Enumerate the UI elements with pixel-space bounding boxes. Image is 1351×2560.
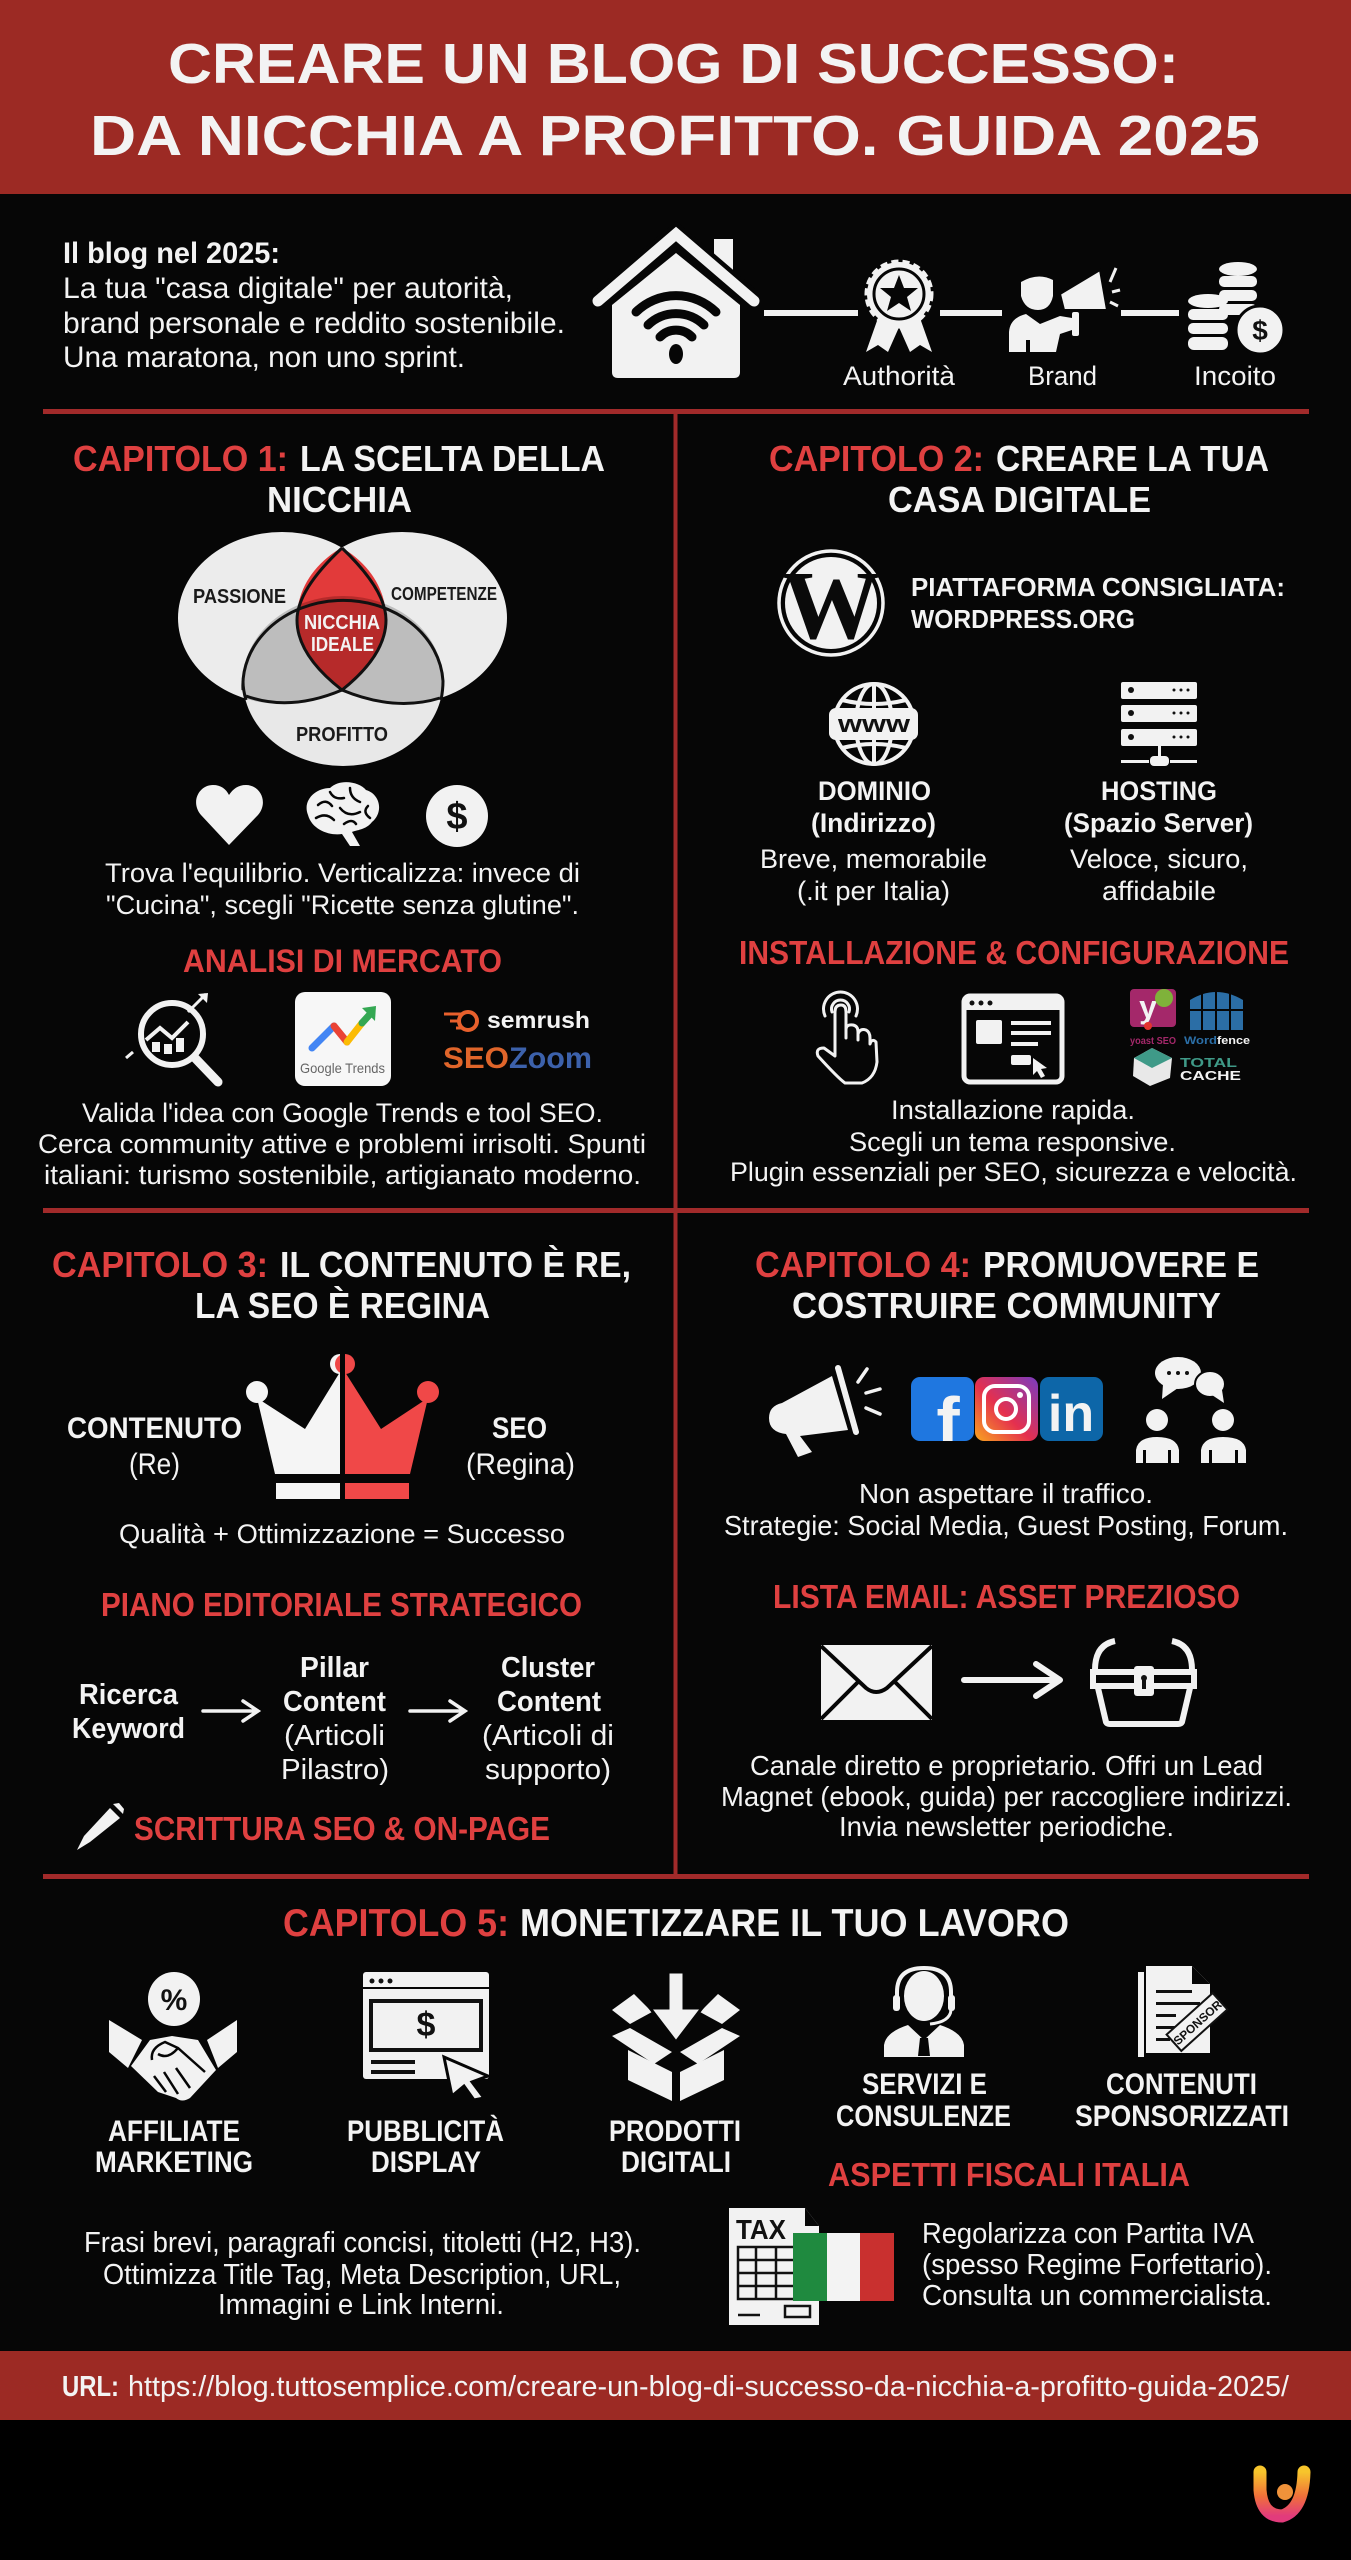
heading: chapter 2: CREARE LA TUA	[996, 438, 1269, 479]
logo: wordpress: W	[782, 552, 880, 660]
heading: chapter 1: CAPITOLO 1:	[73, 438, 288, 479]
text: tax advice: (spesso Regime Forfettario).	[922, 2249, 1272, 2281]
text: domain: (Indirizzo)	[811, 808, 936, 838]
icon: brain	[307, 782, 379, 846]
icon: community people	[1136, 1357, 1246, 1463]
venn diagram	[178, 532, 507, 766]
footer url banner: https://blog.tuttosemplice.com/creare-un-blog-di-successo-da-nicchia-a-profitto-guida-2025/	[128, 2371, 1290, 2403]
text: writing tips: Immagini e Link Interni.	[218, 2289, 504, 2321]
icon: sponsored document	[1138, 1966, 1227, 2057]
text: promotion: Non aspettare il traffico.	[859, 1478, 1153, 1509]
icon: affiliate handshake	[109, 1972, 237, 2100]
subheading: email list: LISTA EMAIL: ASSET PREZIOSO	[773, 1578, 1240, 1615]
text: recommended platform: WORDPRESS.ORG	[911, 604, 1135, 634]
text: market analysis: Valida l'idea con Google Trends e tool SEO.	[82, 1098, 603, 1128]
header banner: CREARE UN BLOG DI SUCCESSO:	[168, 32, 1179, 96]
flow step: keyword research	[72, 1679, 185, 1745]
icon: facebook	[911, 1377, 974, 1441]
text: email list	[721, 1750, 1292, 1842]
intro text: Il blog nel 2025:	[63, 237, 280, 270]
icon: affiliate handshake: %	[161, 1984, 187, 2017]
label: sponsored content	[1075, 2068, 1289, 2133]
label: sponsored content: CONTENUTI	[1106, 2068, 1257, 2101]
label: sponsored content: SPONSORIZZATI	[1075, 2100, 1289, 2133]
text: email list: Magnet (ebook, guida) per raccogliere indirizzi.	[721, 1781, 1292, 1812]
icon: tax document with italian flag	[729, 2208, 894, 2325]
heading: chapter 5: MONETIZZARE IL TUO LAVORO	[520, 1902, 1069, 1945]
subheading: editorial plan: PIANO EDITORIALE STRATEGICO	[101, 1586, 582, 1623]
icon: sponsored document: SPONSOR	[1171, 1997, 1225, 2048]
flow step: cluster content: (Articoli di	[482, 1720, 614, 1752]
heading: chapter 5	[283, 1902, 1069, 1945]
text: tax advice: Regolarizza con Partita IVA	[922, 2218, 1255, 2250]
icon labels: Brand	[1028, 361, 1097, 391]
heading: chapter 3: LA SEO È REGINA	[195, 1285, 490, 1326]
logo: google trends	[295, 992, 391, 1086]
footer url banner: URL:	[62, 2371, 119, 2403]
subheading: market analysis: ANALISI DI MERCATO	[183, 943, 502, 979]
label: display advertising: DISPLAY	[371, 2146, 481, 2179]
heading: chapter 1: LA SCELTA DELLA	[300, 438, 605, 479]
logo: seozoom: SEO	[443, 1042, 509, 1075]
text: recommended platform: PIATTAFORMA CONSIGLIATA:	[911, 572, 1285, 602]
panel: chapter 5	[84, 1902, 1289, 2325]
venn diagram: PROFITTO	[296, 724, 388, 746]
heading: chapter 2	[769, 438, 1269, 520]
label: digital products: DIGITALI	[621, 2146, 731, 2179]
icon: tax document with italian flag: TAX	[736, 2214, 786, 2245]
text: promotion	[724, 1478, 1288, 1541]
flow step: keyword research: Ricerca	[79, 1679, 179, 1711]
logo: semrush	[444, 1007, 590, 1033]
arrow	[964, 1664, 1060, 1696]
logo: semrush: semrush	[487, 1007, 590, 1033]
intro text	[63, 237, 565, 374]
venn diagram: IDEALE	[311, 634, 374, 656]
venn diagram: NICCHIA	[304, 612, 380, 634]
label: digital products	[609, 2115, 741, 2179]
text: promotion: Strategie: Social Media, Guest Posting, Forum.	[724, 1510, 1288, 1541]
logo: wordfence	[1184, 992, 1250, 1047]
label: content: CONTENUTO	[67, 1412, 242, 1445]
arrow	[203, 1701, 258, 1721]
label: digital products: PRODOTTI	[609, 2115, 741, 2148]
logo: wordfence: fence	[1217, 1035, 1250, 1047]
heading: chapter 3: IL CONTENUTO È RE,	[280, 1244, 631, 1285]
text: writing tips: Frasi brevi, paragrafi concisi, titoletti (H2, H3).	[84, 2227, 641, 2259]
text: niche	[105, 858, 580, 920]
label: display advertising	[347, 2114, 504, 2179]
text: installation: Installazione rapida.	[891, 1095, 1135, 1125]
connector lines	[764, 310, 1179, 316]
label: services: CONSULENZE	[836, 2100, 1011, 2133]
text: hosting: affidabile	[1102, 876, 1216, 906]
venn diagram: PASSIONE	[193, 586, 286, 608]
icon: person with megaphone	[1009, 268, 1120, 352]
arrow	[410, 1701, 465, 1721]
label: affiliate marketing: AFFILIATE	[108, 2115, 240, 2148]
flow step: pillar content	[281, 1652, 389, 1786]
icon: heart	[196, 785, 263, 845]
heading: chapter 5: CAPITOLO 5:	[283, 1902, 509, 1945]
text: hosting: (Spazio Server)	[1064, 808, 1253, 838]
icon: dollar circle	[426, 785, 488, 847]
icon: display ad: $	[417, 2006, 436, 2044]
footer url banner	[0, 2351, 1351, 2420]
subheading: tax aspects: ASPETTI FISCALI ITALIA	[828, 2156, 1190, 2193]
panel: chapter 3	[52, 1244, 631, 1850]
text: market analysis: italiani: turismo sostenibile, artigianato moderno.	[44, 1160, 641, 1190]
icon: www globe	[829, 684, 918, 764]
flow step: keyword research: Keyword	[72, 1713, 185, 1745]
text: domain	[760, 776, 987, 906]
text: hosting: HOSTING	[1101, 776, 1217, 806]
subheading: installation: INSTALLAZIONE & CONFIGURAZIONE	[739, 934, 1289, 971]
text: niche: Trova l'equilibrio. Verticalizza: invece di	[105, 858, 580, 888]
logo: w3 total cache: CACHE	[1180, 1068, 1241, 1083]
heading: chapter 1	[73, 438, 605, 520]
text: market analysis	[38, 1098, 646, 1190]
icon: digital product box	[612, 1972, 740, 2101]
heading: chapter 4	[755, 1244, 1259, 1326]
subheading: seo writing: SCRITTURA SEO & ON-PAGE	[134, 1810, 550, 1847]
icon labels: Incoito	[1194, 361, 1276, 391]
heading: chapter 1: NICCHIA	[267, 479, 412, 520]
label: affiliate marketing: MARKETING	[95, 2146, 253, 2179]
text: installation	[730, 1095, 1297, 1187]
flow step: cluster content: Content	[497, 1686, 601, 1718]
flow step: cluster content: supporto)	[485, 1754, 611, 1786]
icon: linkedin	[1040, 1377, 1103, 1443]
formula text: Qualità + Ottimizzazione = Successo	[119, 1519, 565, 1549]
heading: chapter 4: COSTRUIRE COMMUNITY	[792, 1285, 1221, 1326]
icon: coins: $	[1252, 315, 1268, 346]
icon: instagram	[975, 1377, 1038, 1441]
logo: yoast seo	[1130, 989, 1176, 1047]
text: domain: (.it per Italia)	[797, 876, 950, 906]
logo: seozoom: Zoom	[509, 1042, 592, 1075]
label: services	[836, 2068, 1011, 2133]
label: services: SERVIZI E	[862, 2068, 987, 2101]
icon: house with wifi	[598, 234, 754, 378]
icon: authority badge	[866, 262, 932, 352]
heading: chapter 4: CAPITOLO 4:	[755, 1244, 971, 1285]
icon: browser window	[964, 996, 1062, 1082]
text: email list: Canale diretto e proprietario. Offri un Lead	[750, 1750, 1263, 1781]
label: content	[67, 1412, 242, 1481]
heading: chapter 3	[52, 1244, 631, 1326]
header banner: DA NICCHIA A PROFITTO. GUIDA 2025	[90, 104, 1260, 168]
flow step: pillar content: (Articoli	[284, 1720, 385, 1752]
text: niche: "Cucina", scegli "Ricette senza glutine".	[106, 890, 579, 920]
logo: w3 total cache: TOTAL	[1180, 1055, 1237, 1070]
icon: megaphone	[769, 1368, 880, 1457]
panel: chapter 2	[730, 438, 1297, 1187]
icon: pencil	[77, 1803, 124, 1850]
label: seo	[466, 1412, 575, 1481]
header banner	[0, 0, 1351, 194]
logo: yoast seo: y	[1139, 989, 1157, 1025]
logo: google trends: Google Trends	[300, 1060, 385, 1076]
logo: brand mark	[1260, 2472, 1304, 2516]
icon: treasure chest	[1093, 1641, 1194, 1724]
icon: envelope	[821, 1645, 932, 1720]
text: writing tips: Ottimizza Title Tag, Meta Description, URL,	[103, 2259, 621, 2291]
logo: seozoom	[443, 1042, 592, 1075]
text: domain: DOMINIO	[818, 776, 931, 806]
icon: server	[1121, 682, 1197, 766]
text: installation: Plugin essenziali per SEO, sicurezza e velocità.	[730, 1157, 1297, 1187]
text: writing tips	[84, 2227, 641, 2321]
intro text: La tua "casa digitale" per autorità,	[63, 272, 513, 305]
heading: chapter 3: CAPITOLO 3:	[52, 1244, 268, 1285]
icon: consulting agent	[884, 1968, 964, 2057]
label: affiliate marketing	[95, 2115, 253, 2179]
crown	[246, 1352, 439, 1502]
panel: chapter 4	[721, 1244, 1292, 1842]
icon: magnifier with chart	[126, 993, 218, 1082]
intro text: Una maratona, non uno sprint.	[63, 341, 465, 374]
panel: chapter 1	[38, 438, 646, 1190]
text: domain: Breve, memorabile	[760, 844, 987, 874]
icon: facebook: f	[936, 1383, 960, 1461]
text: hosting	[1064, 776, 1253, 906]
text: installation: Scegli un tema responsive.	[849, 1127, 1176, 1157]
logo: wordfence: Word	[1184, 1035, 1217, 1047]
icon: display ad	[363, 1972, 489, 2100]
heading: chapter 2: CASA DIGITALE	[888, 479, 1151, 520]
label: display advertising: PUBBLICITÀ	[347, 2114, 504, 2148]
flow step: cluster content	[482, 1652, 614, 1786]
venn diagram: COMPETENZE	[391, 584, 497, 604]
flow step: pillar content: Content	[283, 1686, 386, 1718]
intro text: brand personale e reddito sostenibile.	[63, 307, 565, 340]
text: recommended platform	[911, 572, 1285, 634]
text: market analysis: Cerca community attive e problemi irrisolti. Spunti	[38, 1129, 646, 1159]
icon: dollar circle: $	[446, 796, 468, 838]
icon: tapping hand	[817, 992, 877, 1083]
heading: chapter 2: CAPITOLO 2:	[769, 438, 984, 479]
label: seo: (Regina)	[466, 1448, 575, 1481]
icon labels	[843, 361, 1276, 391]
heading: chapter 4: PROMUOVERE E	[983, 1244, 1259, 1285]
text: hosting: Veloce, sicuro,	[1070, 844, 1248, 874]
icon labels: Authorità	[843, 361, 956, 391]
label: content: (Re)	[129, 1448, 180, 1481]
text: tax advice	[922, 2218, 1272, 2312]
flow step: pillar content: Pillar	[300, 1652, 369, 1684]
logo: w3 total cache	[1133, 1048, 1241, 1086]
icon: linkedin: in	[1048, 1385, 1094, 1443]
icon: www globe: www	[837, 711, 910, 738]
text: tax advice: Consulta un commercialista.	[922, 2280, 1272, 2312]
icon: coins	[1188, 262, 1284, 354]
flow step: cluster content: Cluster	[501, 1652, 595, 1684]
label: seo: SEO	[492, 1412, 547, 1445]
logo: yoast seo: yoast SEO	[1130, 1036, 1176, 1047]
text: email list: Invia newsletter periodiche.	[839, 1811, 1174, 1842]
flow step: pillar content: Pilastro)	[281, 1754, 389, 1786]
